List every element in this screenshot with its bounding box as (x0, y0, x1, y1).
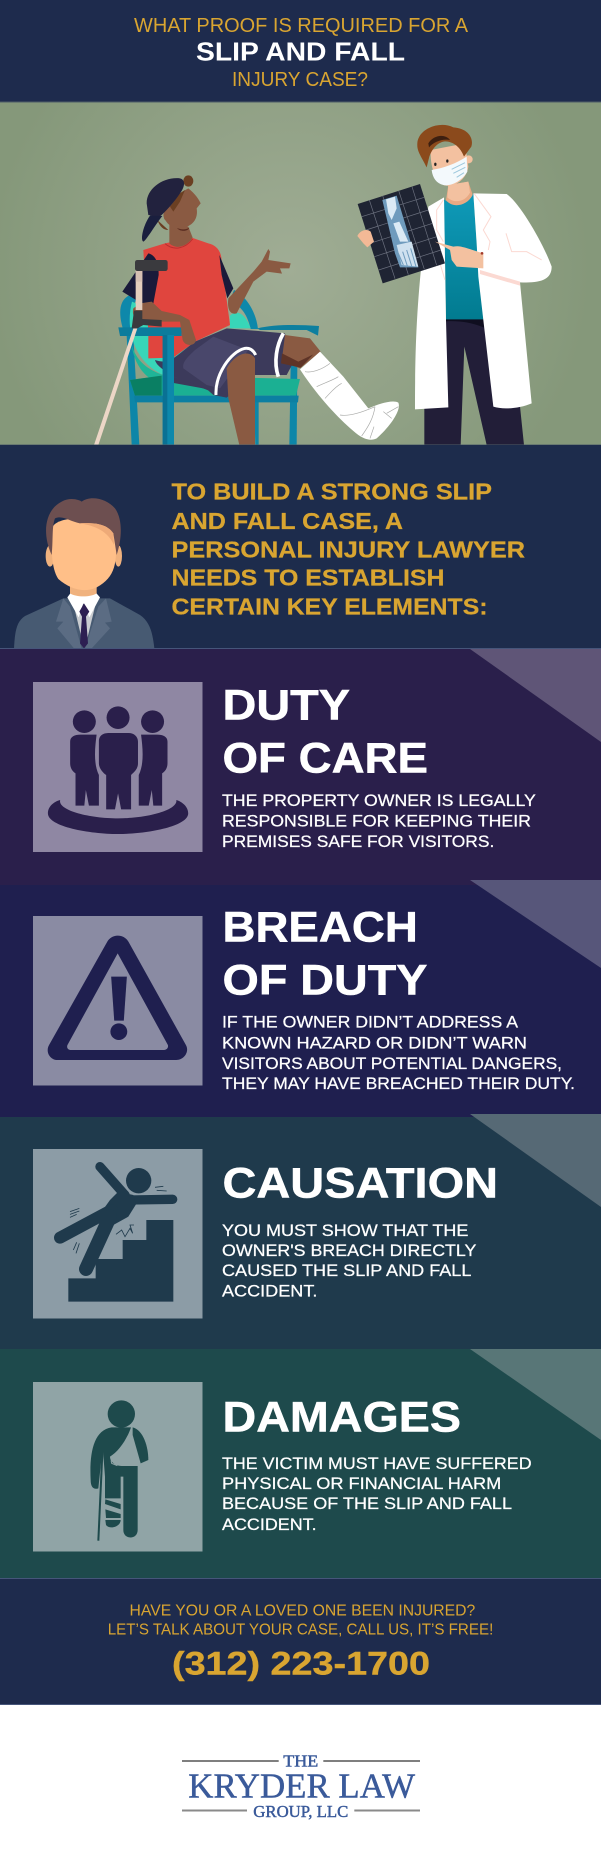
text: causation description: YOU MUST SHOW THAT THE (222, 1221, 468, 1240)
heading: breach of duty (222, 904, 427, 1004)
text: damages description (222, 1454, 532, 1534)
intro text: AND FALL CASE, A (172, 508, 403, 534)
icon: group of people (33, 682, 202, 852)
panel: duty of care (0, 649, 601, 885)
intro text: CERTAIN KEY ELEMENTS: (172, 593, 488, 619)
heading: duty of care: DUTY (222, 681, 350, 729)
title line 3: INJURY CASE? (232, 69, 368, 91)
intro text (172, 478, 525, 619)
text: breach of duty description: KNOWN HAZARD OR DIDN’T WARN (222, 1033, 527, 1052)
text: duty of care description: THE PROPERTY OWNER IS LEGALLY (222, 791, 536, 810)
logo: the kryder law group: THE (283, 1752, 318, 1771)
text: damages description: ACCIDENT. (222, 1515, 317, 1534)
text: breach of duty description: IF THE OWNER DIDN’T ADDRESS A (222, 1013, 519, 1032)
title line 2: SLIP AND FALL (196, 37, 405, 67)
text: causation description: OWNER'S BREACH DIRECTLY (222, 1241, 476, 1260)
panel: intro with lawyer (0, 445, 601, 649)
text: duty of care description: RESPONSIBLE FOR KEEPING THEIR (222, 812, 531, 831)
illustration: doctor holding x-ray and leg cast (300, 125, 552, 445)
text: phone number: (312) 223-1700 (172, 1645, 430, 1681)
intro text: NEEDS TO ESTABLISH (172, 565, 444, 591)
text: damages description: PHYSICAL OR FINANCIAL HARM (222, 1474, 501, 1493)
heading: duty of care (222, 681, 428, 783)
title line 1: WHAT PROOF IS REQUIRED FOR A (134, 15, 469, 37)
icon: person falling on stairs (33, 1149, 202, 1318)
heading: breach of duty: OF DUTY (222, 956, 427, 1004)
icon: injured person with sling and crutch (33, 1382, 202, 1552)
panel: call to action (0, 1578, 601, 1705)
heading: damages: DAMAGES (222, 1394, 461, 1442)
logo: the kryder law group: GROUP, LLC (253, 1802, 348, 1821)
text: call to action: HAVE YOU OR A LOVED ONE BEEN INJURED? (130, 1602, 475, 1619)
intro text: PERSONAL INJURY LAWYER (172, 536, 525, 562)
text: causation description: CAUSED THE SLIP AND FALL (222, 1261, 471, 1280)
text: call to action: LET’S TALK ABOUT YOUR CASE, CALL US, IT’S FREE! (108, 1621, 493, 1638)
intro text: TO BUILD A STRONG SLIP (172, 478, 492, 504)
panel: breach of duty (0, 880, 601, 1117)
text: breach of duty description: VISITORS ABOUT POTENTIAL DANGERS, (222, 1054, 562, 1073)
text: damages description: THE VICTIM MUST HAVE SUFFERED (222, 1454, 532, 1473)
heading: breach of duty: BREACH (222, 904, 418, 952)
heading: duty of care: OF CARE (222, 735, 428, 783)
icon: warning triangle (33, 916, 202, 1086)
panel: title header (0, 0, 601, 102)
text: duty of care description: PREMISES SAFE FOR VISITORS. (222, 832, 494, 851)
text: duty of care description (222, 791, 536, 851)
illustration: patient on chair with crutch (94, 175, 321, 445)
icon: lawyer portrait (14, 498, 154, 648)
text: causation description: ACCIDENT. (222, 1282, 317, 1301)
text: damages description: BECAUSE OF THE SLIP AND FALL (222, 1494, 512, 1513)
panel: causation (0, 1114, 601, 1349)
logo: the kryder law group: KRYDER LAW (188, 1766, 415, 1805)
text: breach of duty description (222, 1013, 575, 1093)
text: breach of duty description: THEY MAY HAVE BREACHED THEIR DUTY. (222, 1074, 575, 1093)
illustration: patient and doctor (0, 102, 601, 446)
heading: causation: CAUSATION (222, 1160, 498, 1208)
panel: damages (0, 1349, 601, 1578)
logo: the kryder law group (0, 1705, 601, 1862)
text: causation description (222, 1221, 476, 1301)
text: call to action (108, 1602, 493, 1638)
